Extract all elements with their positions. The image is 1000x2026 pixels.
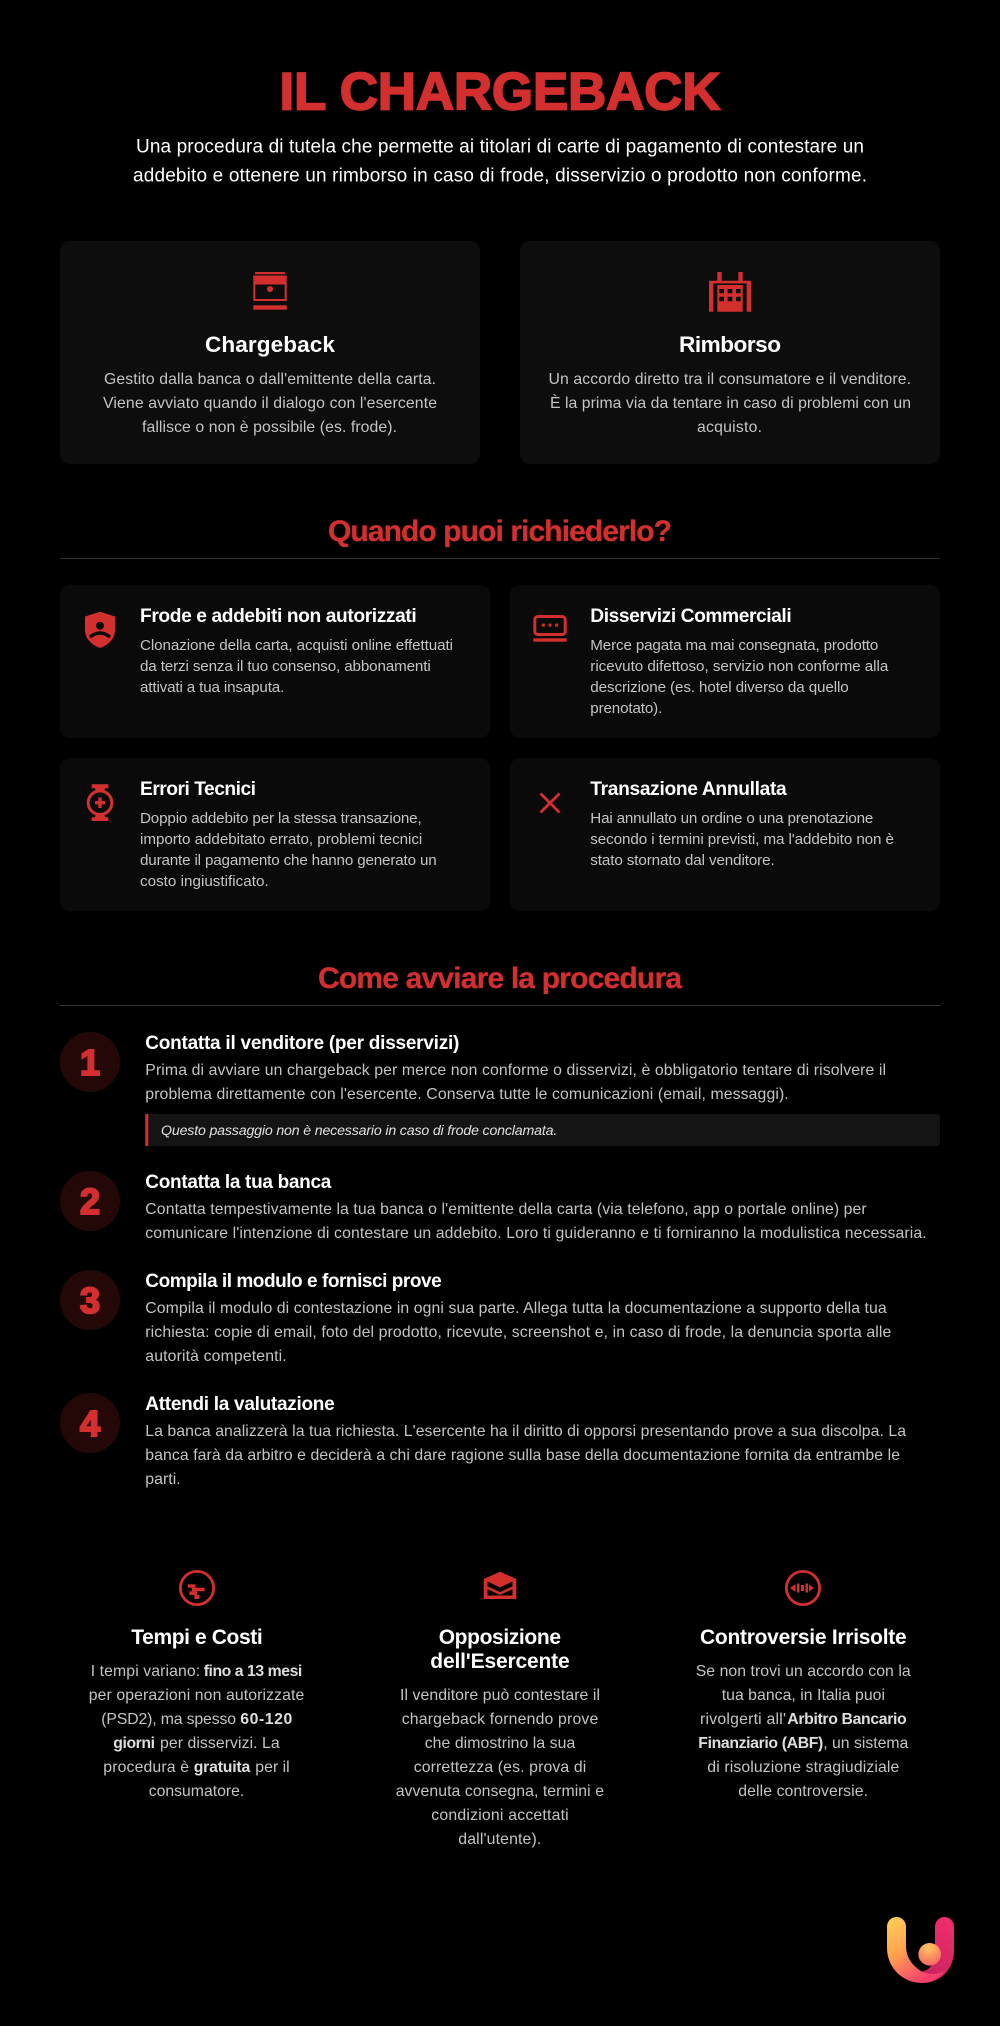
text: controversie xyxy=(696,1663,911,1800)
callout: note: Questo passaggio non è necessario in caso di frode conclamata. xyxy=(161,1123,557,1139)
text: opposizione: condizioni accettati xyxy=(431,1807,569,1824)
subtitle xyxy=(133,136,867,186)
step 4 text: La banca analizzerà la tua richiesta. L'esercente ha il diritto di opporsi presentando prove a sua discolpa. La xyxy=(145,1423,906,1440)
step 4 heading: Attendi la valutazione xyxy=(145,1394,335,1415)
step 3 text: Compila il modulo di contestazione in ogni sua parte. Allega tutta la documentazione a supporto della tua xyxy=(145,1300,887,1317)
subtitle: Una procedura di tutela che permette ai titolari di carte di pagamento di contestare un xyxy=(136,136,864,158)
text: opposizione: correttezza (es. prova di xyxy=(414,1759,586,1776)
text: chargeback description: fallisce o non è possibile (es. frode). xyxy=(142,419,397,436)
text: controversie: rivolgerti all' xyxy=(700,1711,786,1728)
icon: medical gauge xyxy=(88,784,112,821)
step 1 text: Prima di avviare un chargeback per merce non conforme o disservizi, è obbligatorio tentare di risolvere il xyxy=(145,1062,886,1079)
step 1 xyxy=(60,1032,940,1146)
heading: chargeback: Chargeback xyxy=(205,332,335,357)
heading: transazione annullata: Transazione Annullata xyxy=(590,779,787,800)
text: controversie: , un sistema xyxy=(823,1735,909,1752)
text: opposizione xyxy=(396,1687,604,1848)
heading: opposizione: dell'Esercente xyxy=(430,1650,570,1673)
text: tempi e costi: 60-120 xyxy=(240,1711,293,1728)
heading: disservizi: Disservizi Commerciali xyxy=(590,606,792,627)
panel: frode xyxy=(60,585,490,738)
text: chargeback description: Viene avviato quando il dialogo con l'esercente xyxy=(103,395,437,412)
text: tempi e costi: per disservizi. La xyxy=(160,1735,280,1752)
step number 2 xyxy=(60,1171,120,1231)
text: controversie: di risoluzione stragiudiziale xyxy=(707,1759,900,1776)
text: errori tecnici description: importo addebitato errato, problemi tecnici xyxy=(140,831,422,848)
heading: opposizione xyxy=(430,1626,570,1673)
text: frode description xyxy=(140,637,453,696)
text: errori tecnici description xyxy=(140,810,437,890)
step 4 text xyxy=(145,1423,906,1488)
step 3 heading: Compila il modulo e fornisci prove xyxy=(145,1271,442,1292)
step 4 text: parti. xyxy=(145,1471,181,1488)
step 2 text: Contatta tempestivamente la tua banca o l'emittente della carta (via telefono, app o portale online) per xyxy=(145,1201,867,1218)
text: controversie: delle controversie. xyxy=(738,1783,868,1800)
icon: rimborso calendar xyxy=(709,272,751,312)
step number 1: 1 xyxy=(80,1042,100,1083)
heading: tempi e costi: Tempi e Costi xyxy=(131,1626,263,1649)
column: tempi e costi xyxy=(89,1571,305,1800)
text: controversie: Se non trovi un accordo con la xyxy=(696,1663,911,1680)
heading: frode: Frode e addebiti non autorizzati xyxy=(140,606,417,627)
text: disservizi description: descrizione (es. hotel diverso da quello xyxy=(590,679,849,696)
heading: come avviare la procedura: Come avviare la procedura xyxy=(318,962,682,995)
text: frode description: da terzi senza il tuo consenso, abbonamenti xyxy=(140,658,431,675)
column: opposizione xyxy=(396,1572,604,1848)
step 3 text: richiesta: copie di email, foto del prodotto, ricevute, screenshot e, in caso di frode, la denuncia sporta alle xyxy=(145,1324,892,1341)
step 3 text xyxy=(145,1300,892,1365)
step number 3: 3 xyxy=(80,1280,100,1321)
icon: balance ring xyxy=(786,1571,820,1605)
step number 3 xyxy=(60,1270,120,1330)
text: tempi e costi: fino a 13 mesi xyxy=(204,1663,302,1680)
step 1 heading: Contatta il venditore (per disservizi) xyxy=(145,1033,459,1054)
step number 4 xyxy=(60,1393,120,1453)
step 1 text: problema direttamente con l'esercente. Conserva tutte le comunicazioni (email, messaggi). xyxy=(145,1086,789,1103)
text: errori tecnici description: Doppio addebito per la stessa transazione, xyxy=(140,810,422,827)
text: tempi e costi: consumatore. xyxy=(149,1783,244,1800)
text: chargeback description: Gestito dalla banca o dall'emittente della carta. xyxy=(104,371,436,388)
heading: errori tecnici: Errori Tecnici xyxy=(140,779,256,800)
text: tempi e costi xyxy=(89,1663,305,1800)
heading: controversie: Controversie Irrisolte xyxy=(700,1626,907,1649)
text: opposizione: che dimostrino la sua xyxy=(425,1735,576,1752)
text: errori tecnici description: durante il pagamento che hanno generato un xyxy=(140,852,437,869)
heading: quando puoi richiederlo: Quando puoi richiederlo? xyxy=(328,515,672,548)
text: transazione description xyxy=(590,810,894,869)
step 2 xyxy=(60,1171,927,1242)
step number 4: 4 xyxy=(80,1403,100,1444)
text: disservizi description: ricevuto difettoso, servizio non conforme alla xyxy=(590,658,889,675)
step 2 text xyxy=(145,1201,927,1242)
logo xyxy=(887,1917,954,1983)
icon: laptop xyxy=(533,616,567,642)
heading: opposizione: Opposizione xyxy=(439,1626,561,1649)
text: tempi e costi: per operazioni non autorizzate xyxy=(89,1687,305,1704)
step number 1 xyxy=(60,1032,120,1092)
panel: errori tecnici xyxy=(60,758,490,911)
text: opposizione: dall'utente). xyxy=(458,1831,541,1848)
heading: rimborso: Rimborso xyxy=(679,332,781,357)
step 3 xyxy=(60,1270,892,1365)
text: tempi e costi: I tempi variano: xyxy=(91,1663,200,1680)
icon: clock ring xyxy=(180,1571,214,1605)
step 3 text: autorità competenti. xyxy=(145,1348,287,1365)
text: tempi e costi: (PSD2), ma spesso xyxy=(101,1711,236,1728)
text: rimborso description xyxy=(548,371,911,436)
text: errori tecnici description: costo ingiustificato. xyxy=(140,873,269,890)
text: opposizione: Il venditore può contestare il xyxy=(400,1687,600,1704)
text: rimborso description: acquisto. xyxy=(697,419,762,436)
subtitle: addebito e ottenere un rimborso in caso di frode, disservizio o prodotto non conforme. xyxy=(133,166,867,186)
text: opposizione: avvenuta consegna, termini e xyxy=(396,1783,604,1800)
column: controversie xyxy=(696,1571,911,1800)
text: disservizi description xyxy=(590,637,889,717)
icon: open envelope xyxy=(484,1572,516,1599)
step 1 text xyxy=(145,1062,886,1103)
title: IL CHARGEBACK xyxy=(280,62,720,122)
panel: chargeback xyxy=(60,241,480,464)
step 2 heading: Contatta la tua banca xyxy=(145,1172,332,1193)
text: controversie: Arbitro Bancario xyxy=(787,1711,907,1728)
text: transazione description: stato stornato dal venditore. xyxy=(590,852,775,869)
text: tempi e costi: giorni xyxy=(113,1735,155,1752)
step 2 text: comunicare l'intenzione di contestare un addebito. Loro ti guideranno e ti forniranno la modulistica necessaria. xyxy=(145,1225,927,1242)
text: transazione description: Hai annullato un ordine o una prenotazione xyxy=(590,810,873,827)
text: rimborso description: Un accordo diretto tra il consumatore e il venditore. xyxy=(548,371,911,388)
text: transazione description: secondo i termini previsti, ma l'addebito non è xyxy=(590,831,894,848)
text: controversie: tua banca, in Italia puoi xyxy=(722,1687,885,1704)
text: opposizione: chargeback fornendo prove xyxy=(402,1711,599,1728)
text: tempi e costi: procedura è xyxy=(103,1759,189,1776)
step 4 text: banca farà da arbitro e deciderà a chi dare ragione sulla base della documentazione fornita da entrambe le xyxy=(145,1447,900,1464)
text: controversie: Finanziario (ABF) xyxy=(698,1735,823,1752)
icon: shield xyxy=(85,612,115,648)
text: disservizi description: Merce pagata ma mai consegnata, prodotto xyxy=(590,637,878,654)
callout: note xyxy=(145,1114,940,1146)
step 4 xyxy=(60,1393,906,1488)
panel: disservizi xyxy=(510,585,940,738)
step number 2: 2 xyxy=(80,1181,100,1222)
text: chargeback description xyxy=(103,371,437,436)
panel: rimborso xyxy=(520,241,940,464)
icon: chargeback card xyxy=(253,272,287,310)
text: rimborso description: È la prima via da tentare in caso di problemi con un xyxy=(550,393,911,412)
text: tempi e costi: per il xyxy=(255,1759,290,1776)
text: disservizi description: prenotato). xyxy=(590,700,662,717)
text: tempi e costi: gratuita xyxy=(194,1759,251,1776)
text: frode description: Clonazione della carta, acquisti online effettuati xyxy=(140,637,453,654)
panel: transazione annullata xyxy=(510,758,940,911)
text: frode description: attivati a tua insaputa. xyxy=(140,679,284,696)
icon: cross xyxy=(540,794,560,812)
